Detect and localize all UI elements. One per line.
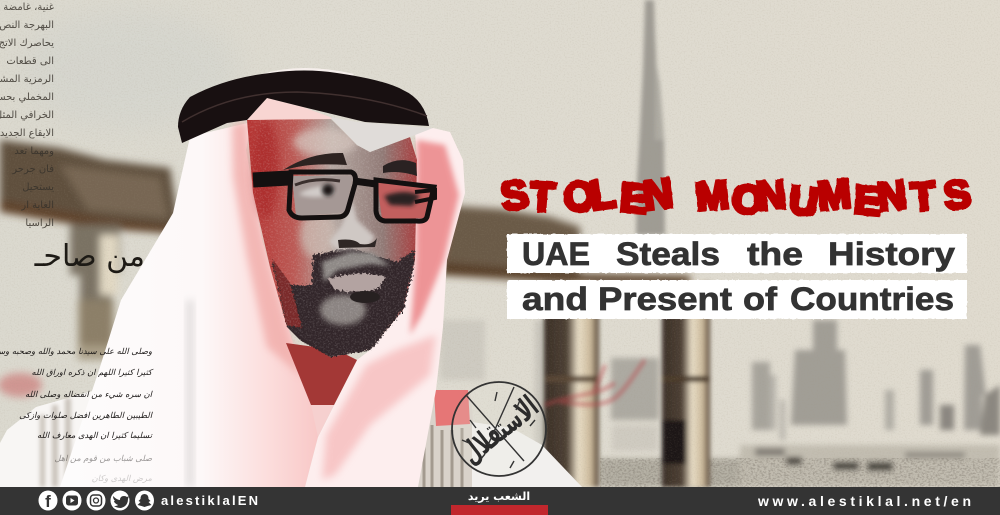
grey vertical fold shadow [186,300,194,487]
social icons [38,490,154,511]
background: columns [544,282,710,487]
neck [286,343,357,405]
eyebrow left [283,153,347,170]
old Arabic manuscript text: غنية، غامضة [3,2,54,13]
title: Stolen Monuments [498,170,974,225]
beard and skin grain [247,118,417,358]
calligraphy overlaid on robe: صلى شباب من قوم من اهل [54,453,153,464]
background: city skyline [440,320,1000,487]
title: Stolen Monuments: STOLEN [498,170,675,222]
logo: circular Arabic seal [452,382,546,476]
old Arabic manuscript text: البهرجة النص [0,20,54,31]
background: Burj Khalifa tower [636,0,665,235]
figure: man in white headdress [0,68,582,487]
old Arabic manuscript text: الغاية ار [20,200,54,211]
Arabic slogan: الشعب يريد [468,490,530,503]
nostril shadow [338,238,377,248]
robe stripes left [40,398,71,487]
old Arabic manuscript text: فان جرحر [11,164,54,175]
subtitle banner: UAE [522,236,590,272]
calligraphy overlaid on robe: الطيبين الطاهرين افضل صلوات وازكى [19,410,154,421]
robe shoulder left [0,380,200,487]
white ghutra top edge [262,68,354,84]
social handle: alestiklalEN [161,493,258,508]
subtitle banner: and [522,281,588,317]
forehead white fold [330,117,433,152]
footer bar [0,487,1000,515]
old Arabic manuscript text: ومهما تعد [14,146,54,157]
ghutra main cloth [60,122,318,487]
old Arabic manuscript text: يحاصرك الاتج [0,38,54,49]
red tab [451,505,548,515]
old Arabic manuscript text: الايقاع الجديد [0,128,54,139]
collar below neck [311,405,334,437]
face [247,118,417,357]
beard [272,248,415,357]
subtitle banner: the [747,236,803,272]
title: Stolen Monuments: MONUMENTS [693,172,974,225]
old Arabic manuscript text: الى قطعات [6,56,54,67]
robe shoulder right [472,422,582,487]
agal black band [178,70,429,143]
moustache grey patch [322,252,390,282]
glasses [253,172,435,221]
red scribble on wall [545,360,645,405]
background: stone lintel left [0,140,180,360]
subtitle banner: Present [598,281,732,317]
ghutra right fold [305,128,465,487]
logo: circular Arabic seal: الاستقلال [454,389,545,471]
cheek highlight [300,211,336,259]
pink edge along face [232,121,302,377]
red cheek left [253,122,279,218]
subtitle banner: of [743,281,777,317]
eyebrow right [383,160,417,176]
red stain left wall [0,373,42,397]
goatee grey patch [320,295,366,325]
forehead highlight [293,128,357,156]
left eye [292,176,352,217]
subtitle banner [507,234,967,319]
subtitle banner: Steals [616,236,720,272]
calligraphy overlaid on robe: تسليما كثيرا ان الهدى معارف الله [37,430,154,441]
subtitle banner: Countries [790,281,954,317]
subtitle banner: History [828,236,955,272]
website URL: www.alestiklal.net/en [757,493,971,509]
calligraphy overlaid on robe: ان سره شيء من انفضاله وصلى الله [25,389,154,400]
old Arabic manuscript text: يستحيل [22,182,54,193]
nose [329,200,375,250]
skyline ground texture [600,458,1000,487]
old Arabic manuscript text [0,2,54,229]
large Arabic brush script: من صاحـ [34,239,145,274]
red wash on right fold [410,140,459,335]
headdress fold over forehead [247,98,333,120]
lower lip shadow [350,291,380,303]
background: stone lintel right [440,205,690,285]
right eye [377,182,435,219]
calligraphy overlaid on robe: كثيرا كثيرا اللهم ان ذكره اوراق الله [32,367,154,378]
calligraphy overlaid on robe [0,346,154,484]
social icons: f [45,492,51,511]
calligraphy overlaid on robe: مرض الهدى وكان [92,473,153,484]
pink wash along chest fold [322,335,436,480]
robe collar stripes [415,390,480,487]
old Arabic manuscript text: الراسيا [25,218,54,229]
lips [328,273,386,292]
